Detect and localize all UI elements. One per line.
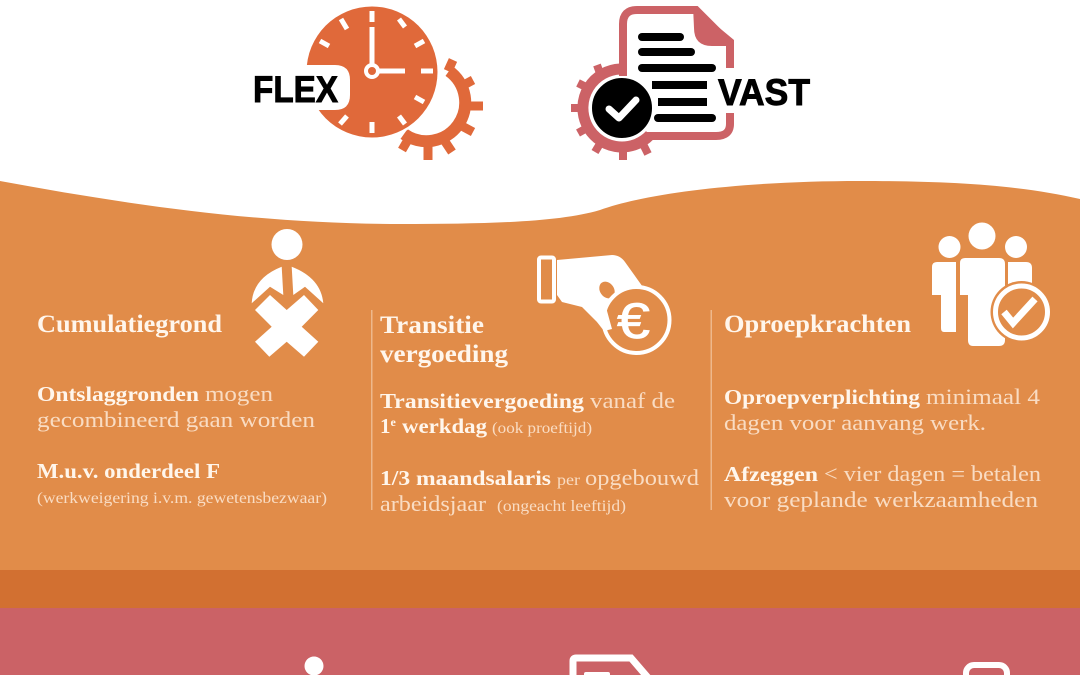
text: oproepverplichting: Oproepverplichting bbox=[724, 385, 921, 409]
icon: person with cross bbox=[252, 229, 323, 357]
icon: hand with euro coin bbox=[539, 255, 670, 353]
text: onderdeel F bbox=[37, 459, 327, 507]
text: afzeggen: < vier dagen = betalen bbox=[824, 461, 1041, 486]
text: ontslaggronden bbox=[37, 381, 315, 432]
text: ontslaggronden: gecombineerd gaan worden bbox=[37, 407, 315, 432]
icon: phone cropped bbox=[966, 665, 1007, 675]
text: onderdeel F: M.u.v. onderdeel F bbox=[37, 459, 220, 483]
heading: Transitie vergoeding: vergoeding bbox=[380, 341, 509, 368]
heading: Cumulatiegrond: Cumulatiegrond bbox=[37, 311, 222, 338]
panel: Transitievergoeding bbox=[380, 255, 699, 516]
text: vanaf eerste werkdag: e bbox=[390, 415, 396, 429]
text: oproepverplichting: dagen voor aanvang werk. bbox=[724, 410, 986, 435]
panel: Cumulatiegrond bbox=[37, 229, 327, 507]
text: vanaf eerste werkdag: (ook proeftijd) bbox=[492, 420, 592, 437]
text: afzeggen: voor geplande werkzaamheden bbox=[724, 487, 1038, 512]
panel: Oproepkrachten bbox=[724, 222, 1052, 512]
icon: group of people with check bbox=[932, 222, 1052, 346]
icon: person head cropped bbox=[304, 656, 324, 675]
text: ontslaggronden: mogen bbox=[205, 381, 273, 406]
text: vanaf eerste werkdag: Transitievergoeding bbox=[380, 389, 585, 413]
icon: hand with euro coin: € bbox=[617, 293, 650, 349]
icon: document cropped bbox=[573, 658, 650, 675]
text: maandsalaris: arbeidsjaar bbox=[380, 491, 487, 516]
text: afzeggen bbox=[724, 461, 1041, 512]
text: maandsalaris bbox=[380, 465, 699, 516]
text: maandsalaris: per bbox=[557, 472, 581, 489]
text: maandsalaris: opgebouwd bbox=[585, 465, 699, 490]
text: oproepverplichting: minimaal 4 bbox=[926, 384, 1040, 409]
text: vanaf eerste werkdag bbox=[380, 388, 675, 438]
text: onderdeel F: (werkweigering i.v.m. gewetensbezwaar) bbox=[37, 490, 327, 507]
text: ontslaggronden: Ontslaggronden bbox=[37, 382, 199, 406]
heading: Transitie vergoeding: Transitie bbox=[380, 312, 484, 339]
text: vanaf eerste werkdag: 1 bbox=[380, 414, 390, 438]
orange wave background bbox=[0, 181, 1080, 572]
label: VAST: VAST bbox=[718, 72, 810, 113]
text: vanaf eerste werkdag: vanaf de bbox=[590, 388, 675, 413]
text: oproepverplichting bbox=[724, 384, 1040, 435]
text: maandsalaris: 1/3 maandsalaris bbox=[380, 466, 551, 490]
dark orange band bbox=[0, 570, 1080, 608]
text: maandsalaris: (ongeacht leeftijd) bbox=[497, 498, 626, 515]
label: FLEX: FLEX bbox=[253, 69, 338, 110]
heading: Transitie vergoeding bbox=[380, 312, 509, 368]
icon: flex clock with gear bbox=[240, 4, 483, 160]
text: vanaf eerste werkdag: werkdag bbox=[402, 414, 488, 438]
icon: vast document with gear bbox=[571, 6, 734, 160]
text: afzeggen: Afzeggen bbox=[724, 462, 818, 486]
rose band bbox=[0, 608, 1080, 675]
heading: Oproepkrachten: Oproepkrachten bbox=[724, 311, 911, 338]
